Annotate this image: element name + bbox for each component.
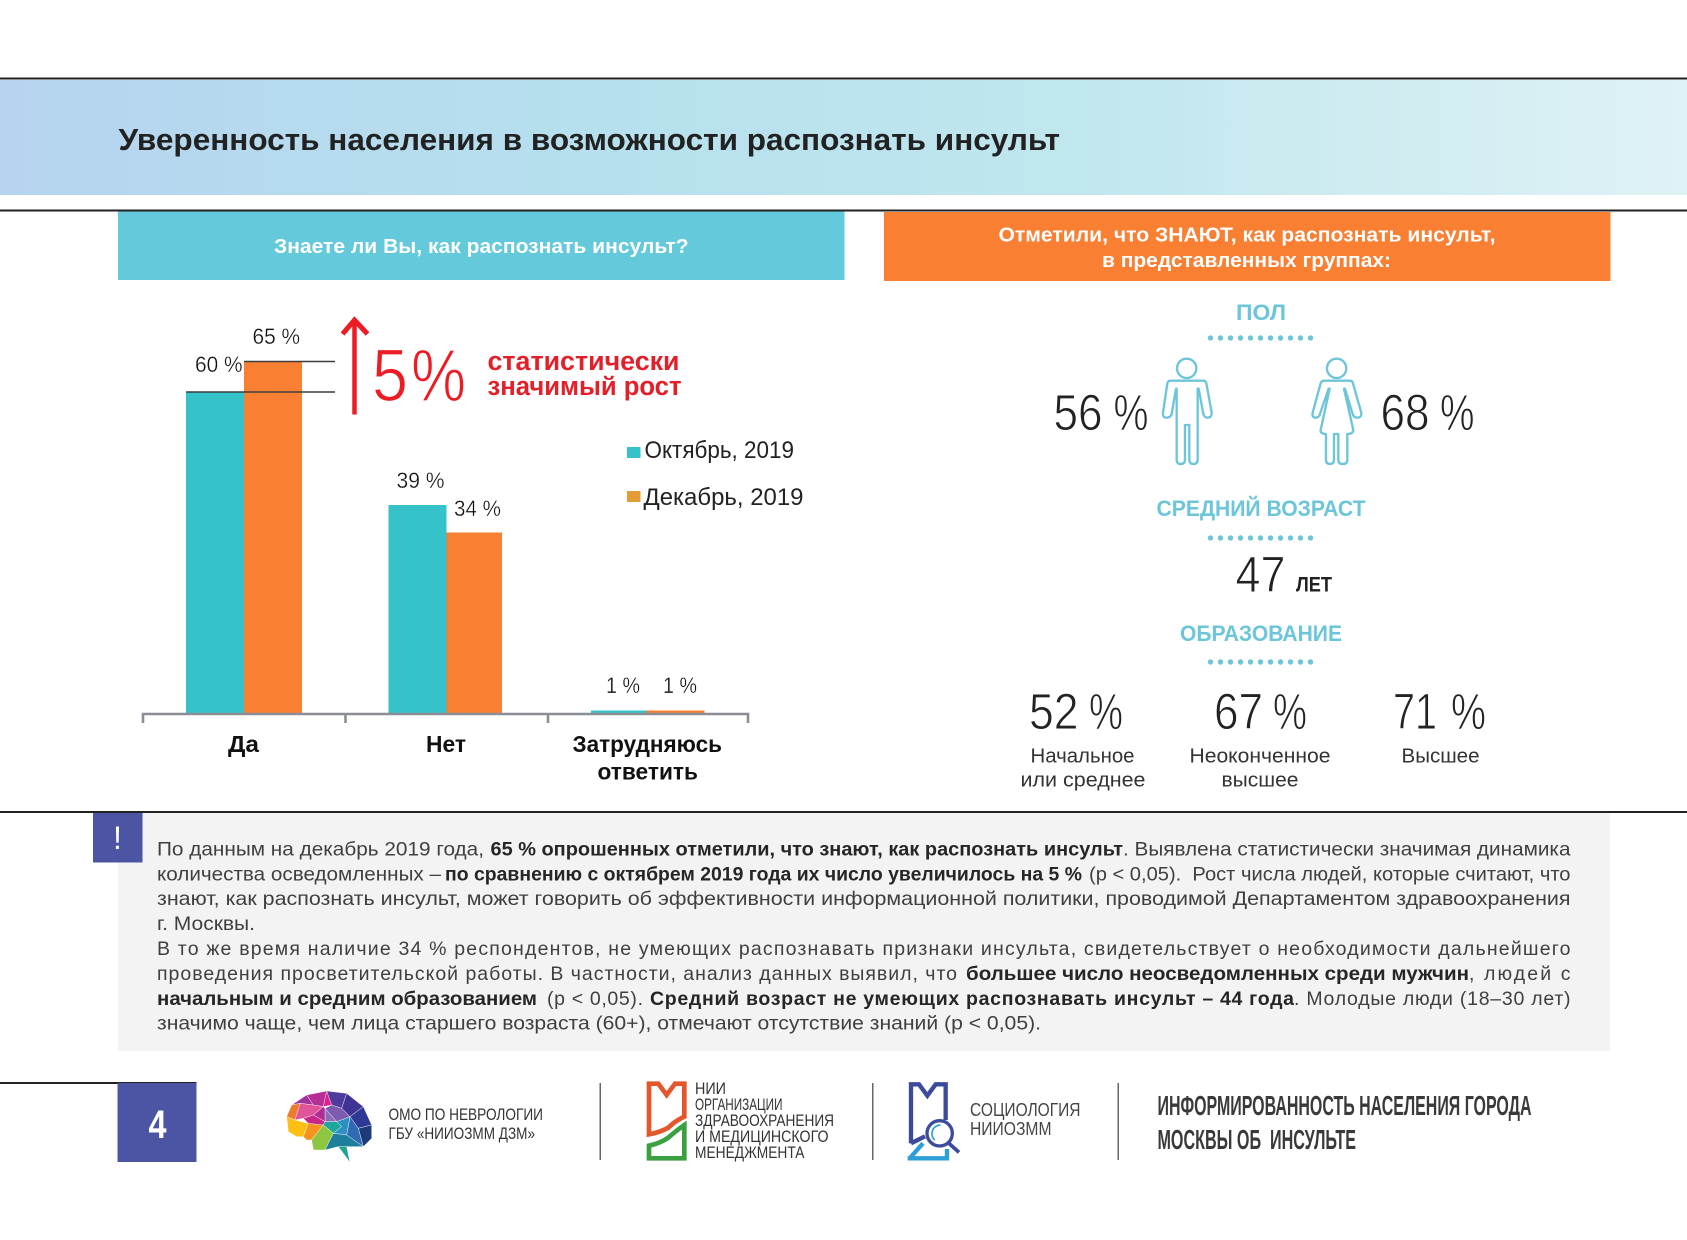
value labels: 39 %: [396, 468, 444, 493]
women value: [1380, 384, 1474, 441]
icon: woman: [1312, 359, 1361, 464]
heading: ОБРАЗОВАНИЕ: ОБРАЗОВАНИЕ: [1180, 621, 1342, 646]
age value: [1236, 546, 1332, 603]
text: sociology: СОЦИОЛОГИЯ: [970, 1100, 1080, 1120]
icon: man: [1163, 359, 1212, 464]
section: education: [1020, 621, 1486, 792]
stat: incomplete higher: [1190, 683, 1330, 792]
axis labels: Затрудняюсь: [572, 731, 722, 757]
section: average age: [1156, 496, 1366, 603]
stat: primary or secondary: 52: [1029, 683, 1078, 740]
text block: (р < 0,05). Рост числа людей, которые считают, что: [1089, 864, 1571, 886]
text: sociology: НИИОЗММ: [970, 1119, 1052, 1139]
age value: ЛЕТ: [1296, 574, 1332, 596]
value labels: 1 %: [606, 673, 640, 698]
text block: г. Москвы.: [157, 913, 255, 935]
text block: По данным на декабрь 2019 года,: [157, 838, 484, 860]
page number: [118, 1083, 196, 1162]
text: NII: НИИ: [695, 1080, 726, 1098]
text block: Средний возраст не умеющих распознавать инсульт – 44 года: [650, 988, 1294, 1010]
women value: 68: [1380, 384, 1430, 441]
legend: [627, 437, 804, 511]
text: NII: ОРГАНИЗАЦИИ: [695, 1096, 782, 1114]
text: sociology: [970, 1100, 1080, 1139]
men value: [1054, 384, 1148, 441]
text block: значимо чаще, чем лица старшего возраста (60+), отмечают отсутствие знаний (р < 0,05).: [157, 1012, 1041, 1034]
text: NII: МЕНЕДЖМЕНТА: [695, 1144, 804, 1162]
value labels: 34 %: [454, 496, 501, 521]
icon: exclamation mark: !: [113, 820, 122, 856]
text block: проведения просветительской работы. В частности, анализ данных выявил, что: [157, 963, 957, 985]
stat: primary or secondary: Начальное: [1030, 746, 1134, 768]
header banner: [0, 78, 1687, 212]
stat: higher: Высшее: [1402, 746, 1480, 768]
arrow: up: [342, 320, 368, 414]
text block: 65 % опрошенных отметили, что знают, как распознать инсульт: [490, 838, 1123, 860]
bars: Нет: [388, 505, 502, 714]
legend: Декабрь, 2019: [644, 484, 804, 511]
page number: 4: [148, 1103, 167, 1147]
text block: знают, как распознать инсульт, может говорить об эффективности информационной политики, проводимой Департаментом здравоохранения: [157, 888, 1570, 910]
stat: higher: 71: [1393, 683, 1437, 740]
value labels: 65 %: [252, 324, 300, 349]
axis labels: [228, 731, 722, 784]
text block: . Выявлена статистически значимая динамика: [1123, 838, 1571, 860]
text block: количества осведомленных –: [157, 864, 441, 886]
axis labels: ответить: [598, 758, 698, 784]
growth value: [372, 334, 466, 417]
age value: 47: [1236, 546, 1286, 603]
text: NII: [695, 1080, 834, 1162]
dots: [1208, 335, 1313, 341]
text block: , людей с: [1469, 963, 1571, 985]
axis: [143, 714, 748, 723]
stat: primary or secondary: %: [1089, 683, 1123, 740]
stat: primary or secondary: [1020, 683, 1146, 792]
text: NII: И МЕДИЦИНСКОГО: [695, 1128, 829, 1146]
women value: %: [1440, 384, 1474, 441]
stat: incomplete higher: Неоконченное: [1190, 746, 1330, 768]
footer: [0, 1080, 1532, 1162]
stat: higher: [1393, 683, 1486, 768]
stat: incomplete higher: %: [1273, 683, 1307, 740]
men value: 56: [1054, 384, 1102, 441]
text block: начальным и средним образованием: [157, 988, 537, 1010]
callout: 5% growth: значимый рост: [488, 373, 682, 401]
bar chart: [143, 324, 804, 784]
panel heading: left question: Знаете ли Вы, как распознать инсульт?: [274, 236, 689, 258]
text block: [157, 838, 1571, 1034]
text: ОМО: [388, 1105, 543, 1143]
text: ОМО: ГБУ «НИИОЗММ ДЗМ»: [388, 1124, 535, 1143]
value labels: 1 %: [663, 673, 697, 698]
panel heading: left question: [118, 212, 844, 280]
report title: [1158, 1090, 1532, 1155]
callout: 5% growth: статистически: [488, 348, 680, 376]
stat: higher: %: [1451, 683, 1486, 740]
stat: incomplete higher: 67: [1214, 683, 1263, 740]
section: gender: [1054, 300, 1474, 464]
men value: %: [1114, 384, 1148, 441]
logo: brain: [287, 1091, 372, 1162]
stat: primary or secondary: или среднее: [1020, 770, 1146, 792]
growth value: 5: [372, 334, 408, 417]
panel heading: right groups: [884, 212, 1610, 281]
bars: Да: [186, 362, 302, 714]
value labels: [195, 324, 697, 698]
callout: 5% growth: [342, 320, 682, 417]
growth value: %: [411, 334, 466, 417]
text block: по сравнению с октябрем 2019 года их число увеличилось на 5 %: [445, 864, 1082, 886]
report title: МОСКВЫ ОБ ИНСУЛЬТЕ: [1158, 1124, 1356, 1155]
axis labels: Нет: [426, 731, 466, 757]
text block: В то же время наличие 34 % респондентов, не умеющих распознавать признаки инсульта, свидетельствует о необходимости дальнейшего: [157, 938, 1571, 960]
axis labels: Да: [228, 731, 259, 757]
value labels: 60 %: [195, 352, 242, 377]
logo: sociology: [908, 1084, 959, 1158]
text: NII: ЗДРАВООХРАНЕНИЯ: [695, 1112, 834, 1130]
legend: Октябрь, 2019: [644, 437, 794, 464]
bars: Затрудняюсь ответить: [591, 710, 704, 714]
dots: [1208, 535, 1313, 541]
icon: exclamation mark: [93, 813, 142, 862]
text block: . Молодые люди (18–30 лет): [1294, 988, 1570, 1010]
text block: (р < 0,05).: [547, 988, 643, 1010]
text block: большее число неосведомленных среди мужчин: [966, 963, 1469, 985]
title: Уверенность населения в возможности распознать инсульт: [118, 122, 1060, 157]
text: ОМО: ОМО ПО НЕВРОЛОГИИ: [388, 1105, 543, 1124]
stat: incomplete higher: высшее: [1222, 770, 1298, 792]
dots: [1208, 659, 1313, 665]
panel: conclusions: [0, 811, 1687, 1051]
panel heading: right groups: в представленных группах:: [1102, 250, 1391, 272]
logo: NII orange-green: [649, 1084, 684, 1158]
heading: СРЕДНИЙ ВОЗРАСТ: СРЕДНИЙ ВОЗРАСТ: [1156, 496, 1366, 521]
panel heading: right groups: Отметили, что ЗНАЮТ, как распознать инсульт,: [998, 224, 1496, 246]
heading: ПОЛ: ПОЛ: [1236, 300, 1286, 325]
reference lines for growth: [186, 362, 335, 392]
